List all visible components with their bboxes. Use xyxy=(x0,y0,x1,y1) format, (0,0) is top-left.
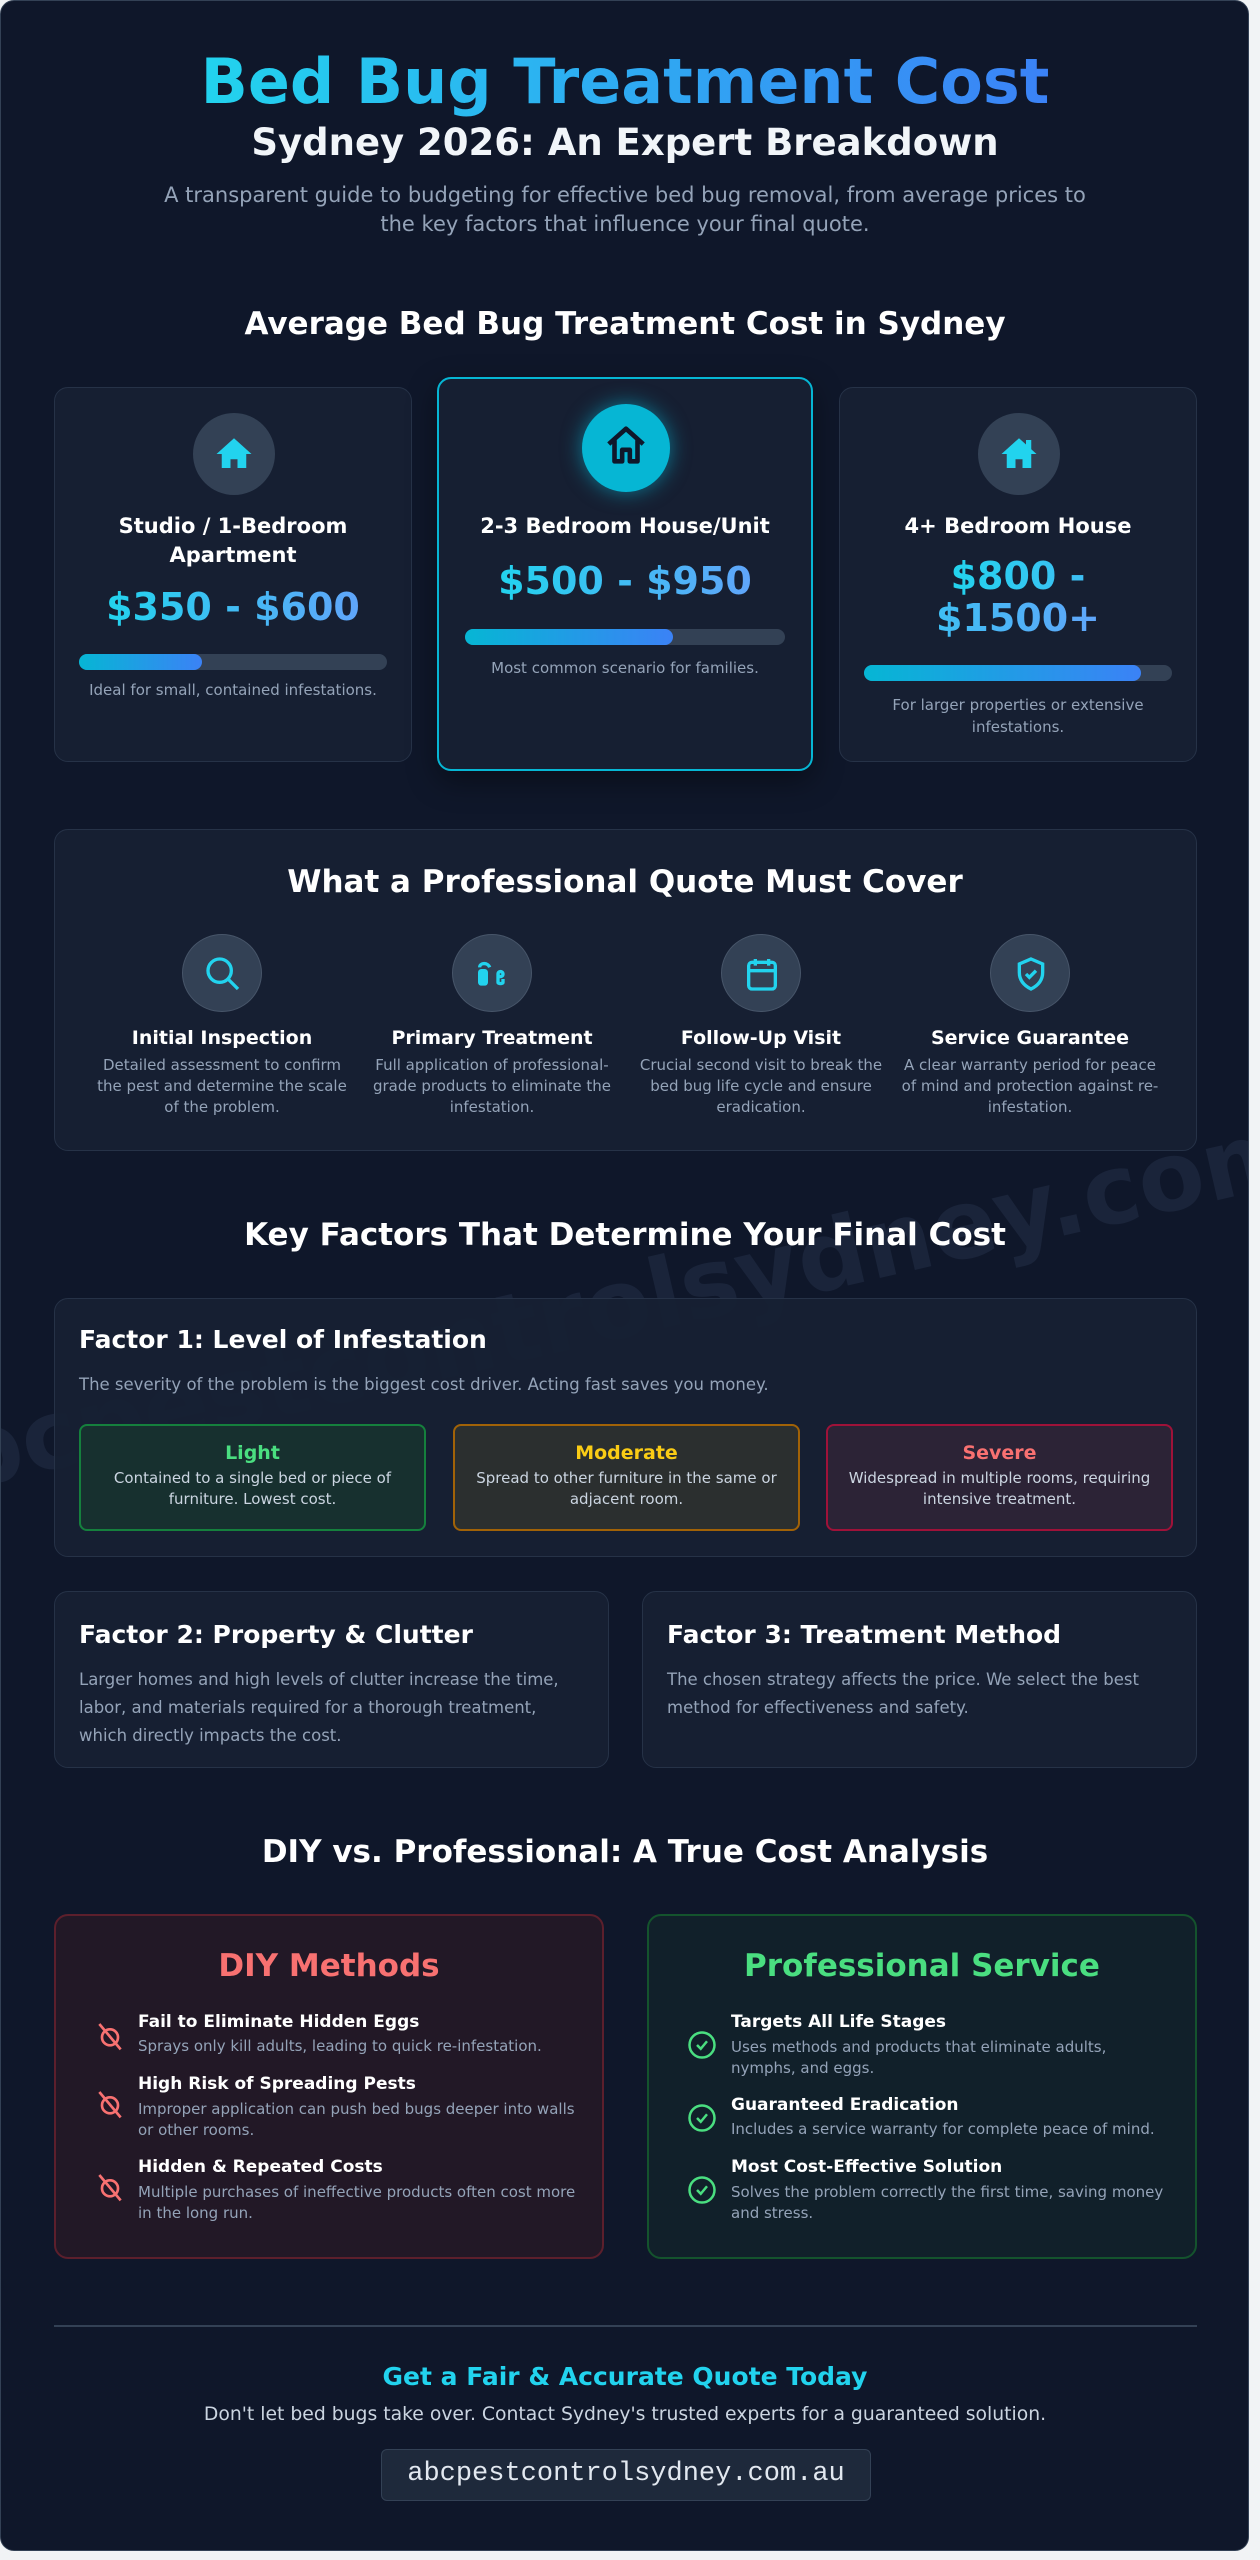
panel: factor 2: Factor 2: Property & Clutter xyxy=(79,1620,473,1649)
item: Hidden & Repeated Costs xyxy=(138,2157,383,2177)
card: studio xyxy=(54,387,412,762)
URL box xyxy=(381,2449,871,2501)
item: Most Cost-Effective Solution xyxy=(731,2157,1002,2177)
icon: shield xyxy=(990,934,1070,1012)
box: moderate xyxy=(453,1424,800,1531)
price: $500 - $950 xyxy=(498,559,752,603)
box: light: Light xyxy=(225,1442,280,1464)
item xyxy=(98,2157,575,2222)
item: follow-up: Follow-Up Visit xyxy=(681,1027,841,1049)
item: Fail to Eliminate Hidden Eggs xyxy=(138,2012,419,2032)
box: moderate: Moderate xyxy=(575,1442,678,1464)
heading: What a Professional Quote Must Cover xyxy=(287,864,963,900)
box: severe: Widespread in multiple rooms, requiring intensive treatment. xyxy=(849,1469,1150,1508)
item: treatment: Primary Treatment xyxy=(391,1027,593,1049)
card title: 4+ Bedroom House xyxy=(905,514,1131,538)
panel: DIY xyxy=(54,1914,604,2259)
item: Uses methods and products that eliminate adults, nymphs, and eggs. xyxy=(731,2038,1106,2077)
panel: factor 2 xyxy=(54,1591,609,1768)
item: guarantee xyxy=(902,934,1158,1116)
heading: average cost: Average Bed Bug Treatment Cost in Sydney xyxy=(244,306,1006,342)
bar xyxy=(465,629,785,645)
panel: factor 3: Factor 3: Treatment Method xyxy=(667,1620,1061,1649)
item xyxy=(688,2157,1163,2222)
box: light: Contained to a single bed or piece of furniture. Lowest cost. xyxy=(114,1469,391,1508)
URL box: abcpestcontrolsydney.com.au xyxy=(407,2459,845,2489)
note: For larger properties or extensive infestations. xyxy=(892,696,1144,736)
price xyxy=(936,554,1100,640)
panel: factor 1: Factor 1: Level of Infestation xyxy=(79,1325,487,1354)
icon: house featured xyxy=(582,404,670,492)
panel: professional xyxy=(647,1914,1197,2259)
item: Guaranteed Eradication xyxy=(731,2095,959,2115)
item: guarantee: Service Guarantee xyxy=(931,1027,1129,1049)
bar xyxy=(79,654,387,670)
item: Targets All Life Stages xyxy=(731,2012,946,2032)
card: 2-3 bedroom (featured) xyxy=(437,377,813,771)
heading: DIY vs pro: DIY vs. Professional: A True Cost Analysis xyxy=(262,1834,988,1870)
panel: factor 3 xyxy=(642,1591,1197,1768)
price: $1500+ xyxy=(936,596,1100,640)
panel: professional: Professional Service xyxy=(744,1948,1100,1984)
panel: factor 1 xyxy=(54,1298,1197,1557)
panel: DIY: DIY Methods xyxy=(218,1948,440,1984)
item xyxy=(688,2012,1106,2077)
panel: factor 3: The chosen strategy affects the price. We select the best method for effectiveness and safety. xyxy=(667,1670,1139,1717)
item: Solves the problem correctly the first time, saving money and stress. xyxy=(731,2183,1163,2222)
box: severe xyxy=(826,1424,1173,1531)
item: treatment xyxy=(373,934,611,1116)
item: Improper application can push bed bugs deeper into walls or other rooms. xyxy=(138,2100,575,2139)
item: Sprays only kill adults, leading to quick re-infestation. xyxy=(138,2037,542,2055)
panel: factor 2: Larger homes and high levels of clutter increase the time, labor, and materials required for a thorough treatment, which directly impacts the cost. xyxy=(79,1670,559,1745)
box: light xyxy=(79,1424,426,1531)
item: inspection: Detailed assessment to confirm the pest and determine the scale of the problem. xyxy=(97,1056,347,1116)
icon: magnifier xyxy=(182,934,262,1012)
item: treatment: Full application of professional-grade products to eliminate the infestation. xyxy=(373,1056,611,1116)
box: severe: Severe xyxy=(962,1442,1037,1464)
item xyxy=(98,2074,575,2139)
icon: spray xyxy=(452,934,532,1012)
card title: Studio / 1-Bedroom xyxy=(119,514,347,538)
item xyxy=(688,2095,1155,2138)
title: Bed Bug Treatment Cost xyxy=(201,45,1049,118)
panel: factor 1: The severity of the problem is the biggest cost driver. Acting fast saves you money. xyxy=(79,1375,769,1394)
CTA text: Don't let bed bugs take over. Contact Sydney's trusted experts for a guaranteed solution. xyxy=(204,2404,1046,2425)
card: 4+ bedroom xyxy=(839,387,1197,762)
bar xyxy=(864,665,1172,681)
box: moderate: Spread to other furniture in the same or adjacent room. xyxy=(476,1469,777,1508)
item: follow-up xyxy=(640,934,882,1116)
item: follow-up: Crucial second visit to break the bed bug life cycle and ensure eradication. xyxy=(640,1056,882,1116)
card title: Apartment xyxy=(170,543,296,567)
intro text: A transparent guide to budgeting for effective bed bug removal, from average prices to the key factors that influence your final quote. xyxy=(164,183,1086,236)
heading: key factors: Key Factors That Determine Your Final Cost xyxy=(244,1217,1006,1253)
note: Most common scenario for families. xyxy=(491,659,759,677)
icon: calendar xyxy=(721,934,801,1012)
price: $800 - xyxy=(951,554,1085,598)
item: Multiple purchases of ineffective products often cost more in the long run. xyxy=(138,2183,575,2222)
item: guarantee: A clear warranty period for peace of mind and protection against re-infestation. xyxy=(902,1056,1158,1116)
card title xyxy=(119,514,347,567)
icon: house xyxy=(193,413,275,495)
subtitle: Sydney 2026: An Expert Breakdown xyxy=(251,121,999,164)
item: Includes a service warranty for complete peace of mind. xyxy=(731,2120,1155,2138)
panel: quote must cover xyxy=(54,829,1197,1151)
item: inspection: Initial Inspection xyxy=(132,1027,312,1049)
item xyxy=(98,2012,542,2055)
card title: 2-3 Bedroom House/Unit xyxy=(480,514,770,538)
CTA heading: Get a Fair & Accurate Quote Today xyxy=(383,2362,867,2391)
price: $350 - $600 xyxy=(106,585,360,629)
note: Ideal for small, contained infestations. xyxy=(89,681,377,699)
item: High Risk of Spreading Pests xyxy=(138,2074,416,2094)
icon: house large xyxy=(978,413,1060,495)
item: inspection xyxy=(97,934,347,1116)
